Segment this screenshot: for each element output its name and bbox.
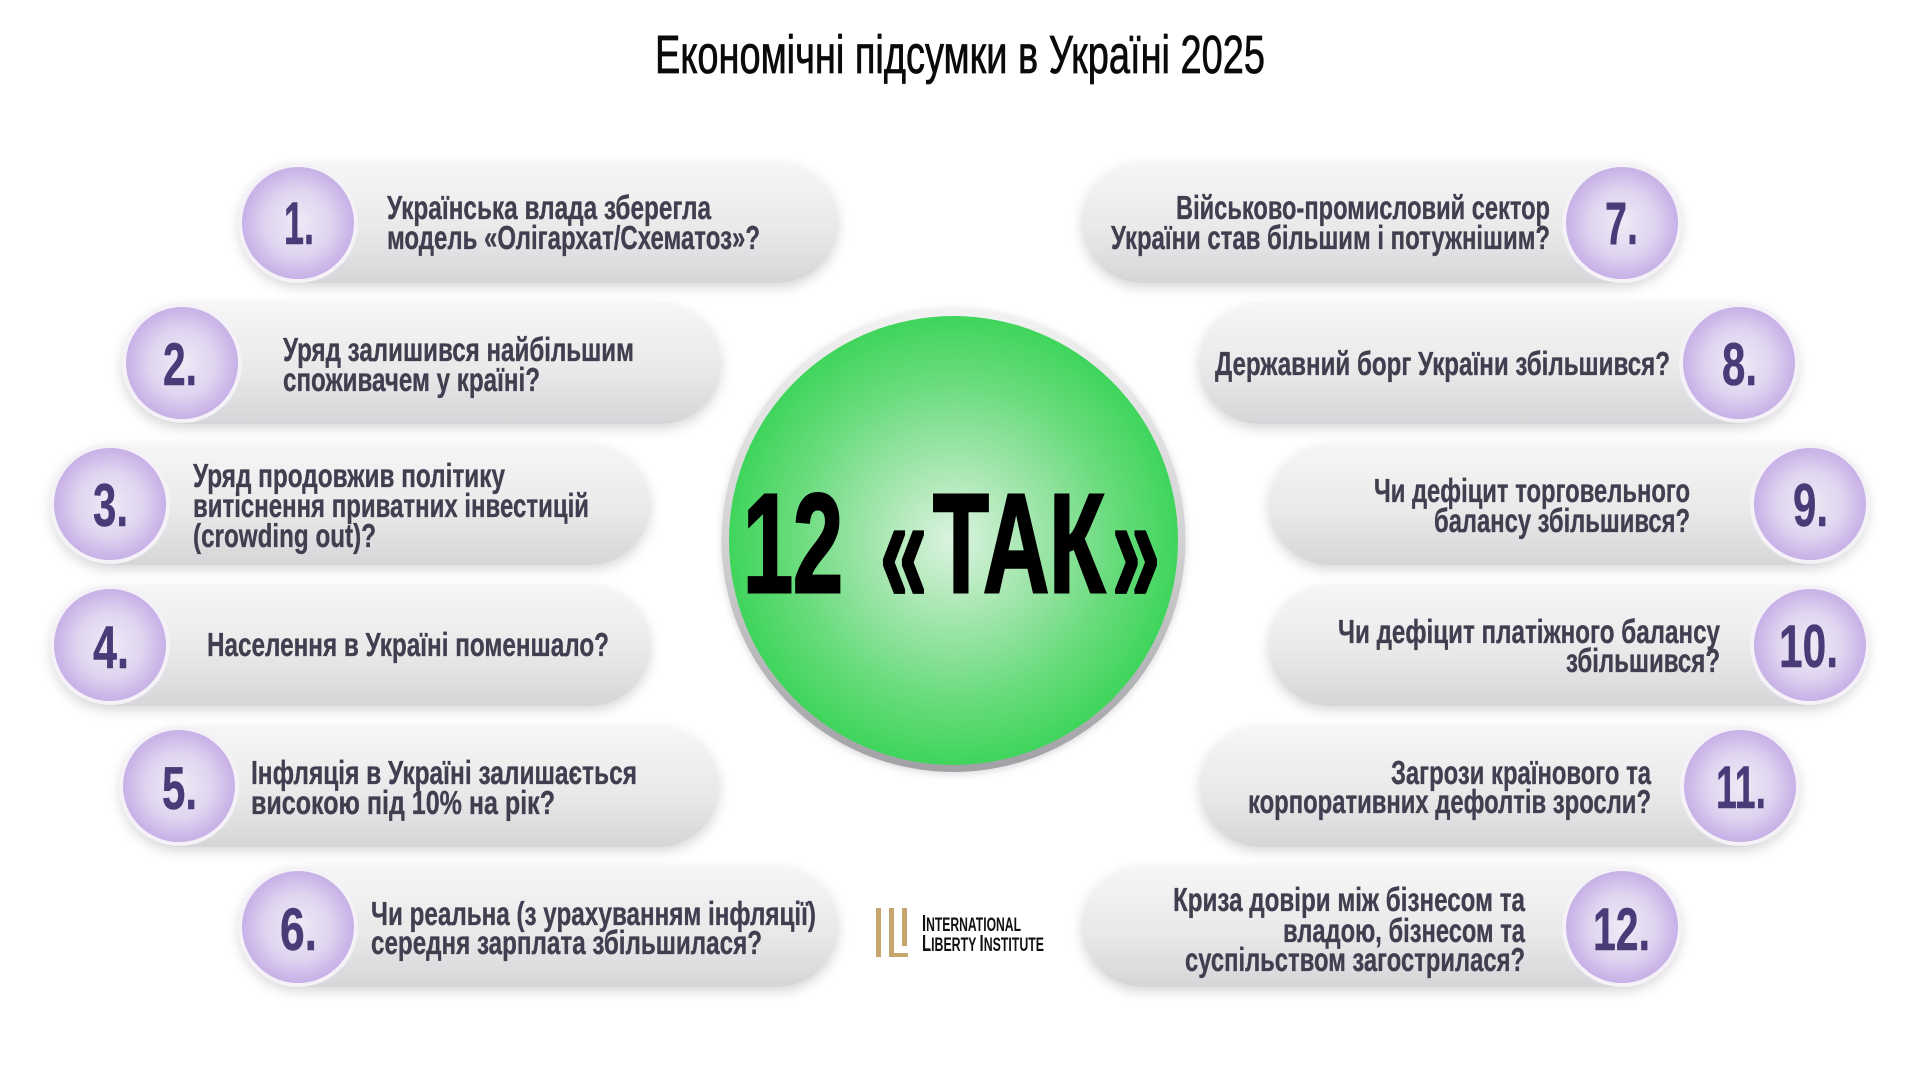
item 11: корпоративних дефолтів зросли? bbox=[1248, 783, 1651, 820]
item 12 bbox=[1082, 867, 1681, 987]
center label: 12 «ТАК»: « bbox=[880, 463, 927, 636]
item 10: збільшився? bbox=[1566, 642, 1720, 679]
item 3: (crowding out)? bbox=[193, 517, 376, 554]
item 4: 4. bbox=[93, 614, 129, 681]
panel: center circle bbox=[722, 308, 1186, 772]
center label: 12 «ТАК»: » bbox=[1112, 463, 1160, 636]
item 8: 8. bbox=[1722, 331, 1757, 398]
item 3: Уряд продовжив політику bbox=[193, 457, 505, 494]
item 2: 2. bbox=[163, 331, 197, 398]
item 1 bbox=[239, 163, 838, 283]
item 7: 7. bbox=[1605, 190, 1638, 257]
item 2: Уряд залишився найбільшим bbox=[283, 331, 634, 368]
item 12: Криза довіри між бізнесом та bbox=[1173, 881, 1525, 918]
item 10: 10. bbox=[1779, 613, 1838, 680]
item 6: Чи реальна (з урахуванням інфляції) bbox=[371, 895, 816, 932]
item 12: 12. bbox=[1593, 896, 1650, 963]
item 9: балансу збільшився? bbox=[1434, 502, 1690, 539]
item 8 bbox=[1199, 304, 1798, 424]
item 11: 11. bbox=[1716, 754, 1766, 821]
item 2 bbox=[122, 304, 721, 424]
item 7 bbox=[1082, 163, 1681, 283]
item 8: Державний борг України збільшився? bbox=[1215, 345, 1670, 382]
item 5 bbox=[120, 727, 719, 847]
item 12: суспільством загострилася? bbox=[1185, 941, 1525, 978]
item 9: 9. bbox=[1793, 472, 1828, 539]
item 9: Чи дефіцит торговельного bbox=[1374, 472, 1690, 509]
item 4: Населення в Україні поменшало? bbox=[207, 626, 609, 663]
item 3 bbox=[51, 445, 650, 565]
center label: 12 «ТАК»: ТАК bbox=[933, 464, 1106, 622]
title: Економічні підсумки в Україні 2025 bbox=[655, 25, 1265, 85]
item 3: 3. bbox=[93, 472, 128, 539]
logo: International Liberty Institute: LIBERTY INSTITUTE bbox=[922, 930, 1044, 956]
item 10: Чи дефіцит платіжного балансу bbox=[1338, 613, 1720, 650]
item 7: Військово-промисловий сектор bbox=[1176, 189, 1550, 226]
center label: 12 «ТАК»: 12 bbox=[743, 464, 843, 622]
center label: 12 «ТАК» bbox=[743, 463, 1160, 636]
logo: International Liberty Institute: INTERNATIONAL bbox=[922, 910, 1021, 936]
item 1: Українська влада зберегла bbox=[387, 189, 711, 226]
item 6 bbox=[239, 867, 838, 987]
item 12: владою, бізнесом та bbox=[1283, 912, 1525, 949]
item 1: модель «Олігархат/Схематоз»? bbox=[387, 219, 760, 256]
item 2: споживачем у країні? bbox=[283, 361, 540, 398]
item 6: середня зарплата збільшилася? bbox=[371, 924, 762, 961]
item 4 bbox=[51, 586, 650, 706]
item 11: Загрози країнового та bbox=[1391, 754, 1651, 791]
item 5: Інфляція в Україні залишається bbox=[251, 754, 637, 791]
item 10 bbox=[1269, 586, 1868, 706]
item 7: України став більшим і потужнішим? bbox=[1111, 219, 1550, 256]
item 5: 5. bbox=[162, 755, 197, 822]
item 3: витіснення приватних інвестицій bbox=[193, 487, 589, 524]
item 5: високою під 10% на рік? bbox=[251, 784, 555, 821]
logo: International Liberty Institute bbox=[876, 908, 1044, 957]
item 11 bbox=[1200, 727, 1799, 847]
item 9 bbox=[1269, 445, 1868, 565]
item 6: 6. bbox=[280, 896, 317, 963]
item 1: 1. bbox=[284, 190, 314, 257]
